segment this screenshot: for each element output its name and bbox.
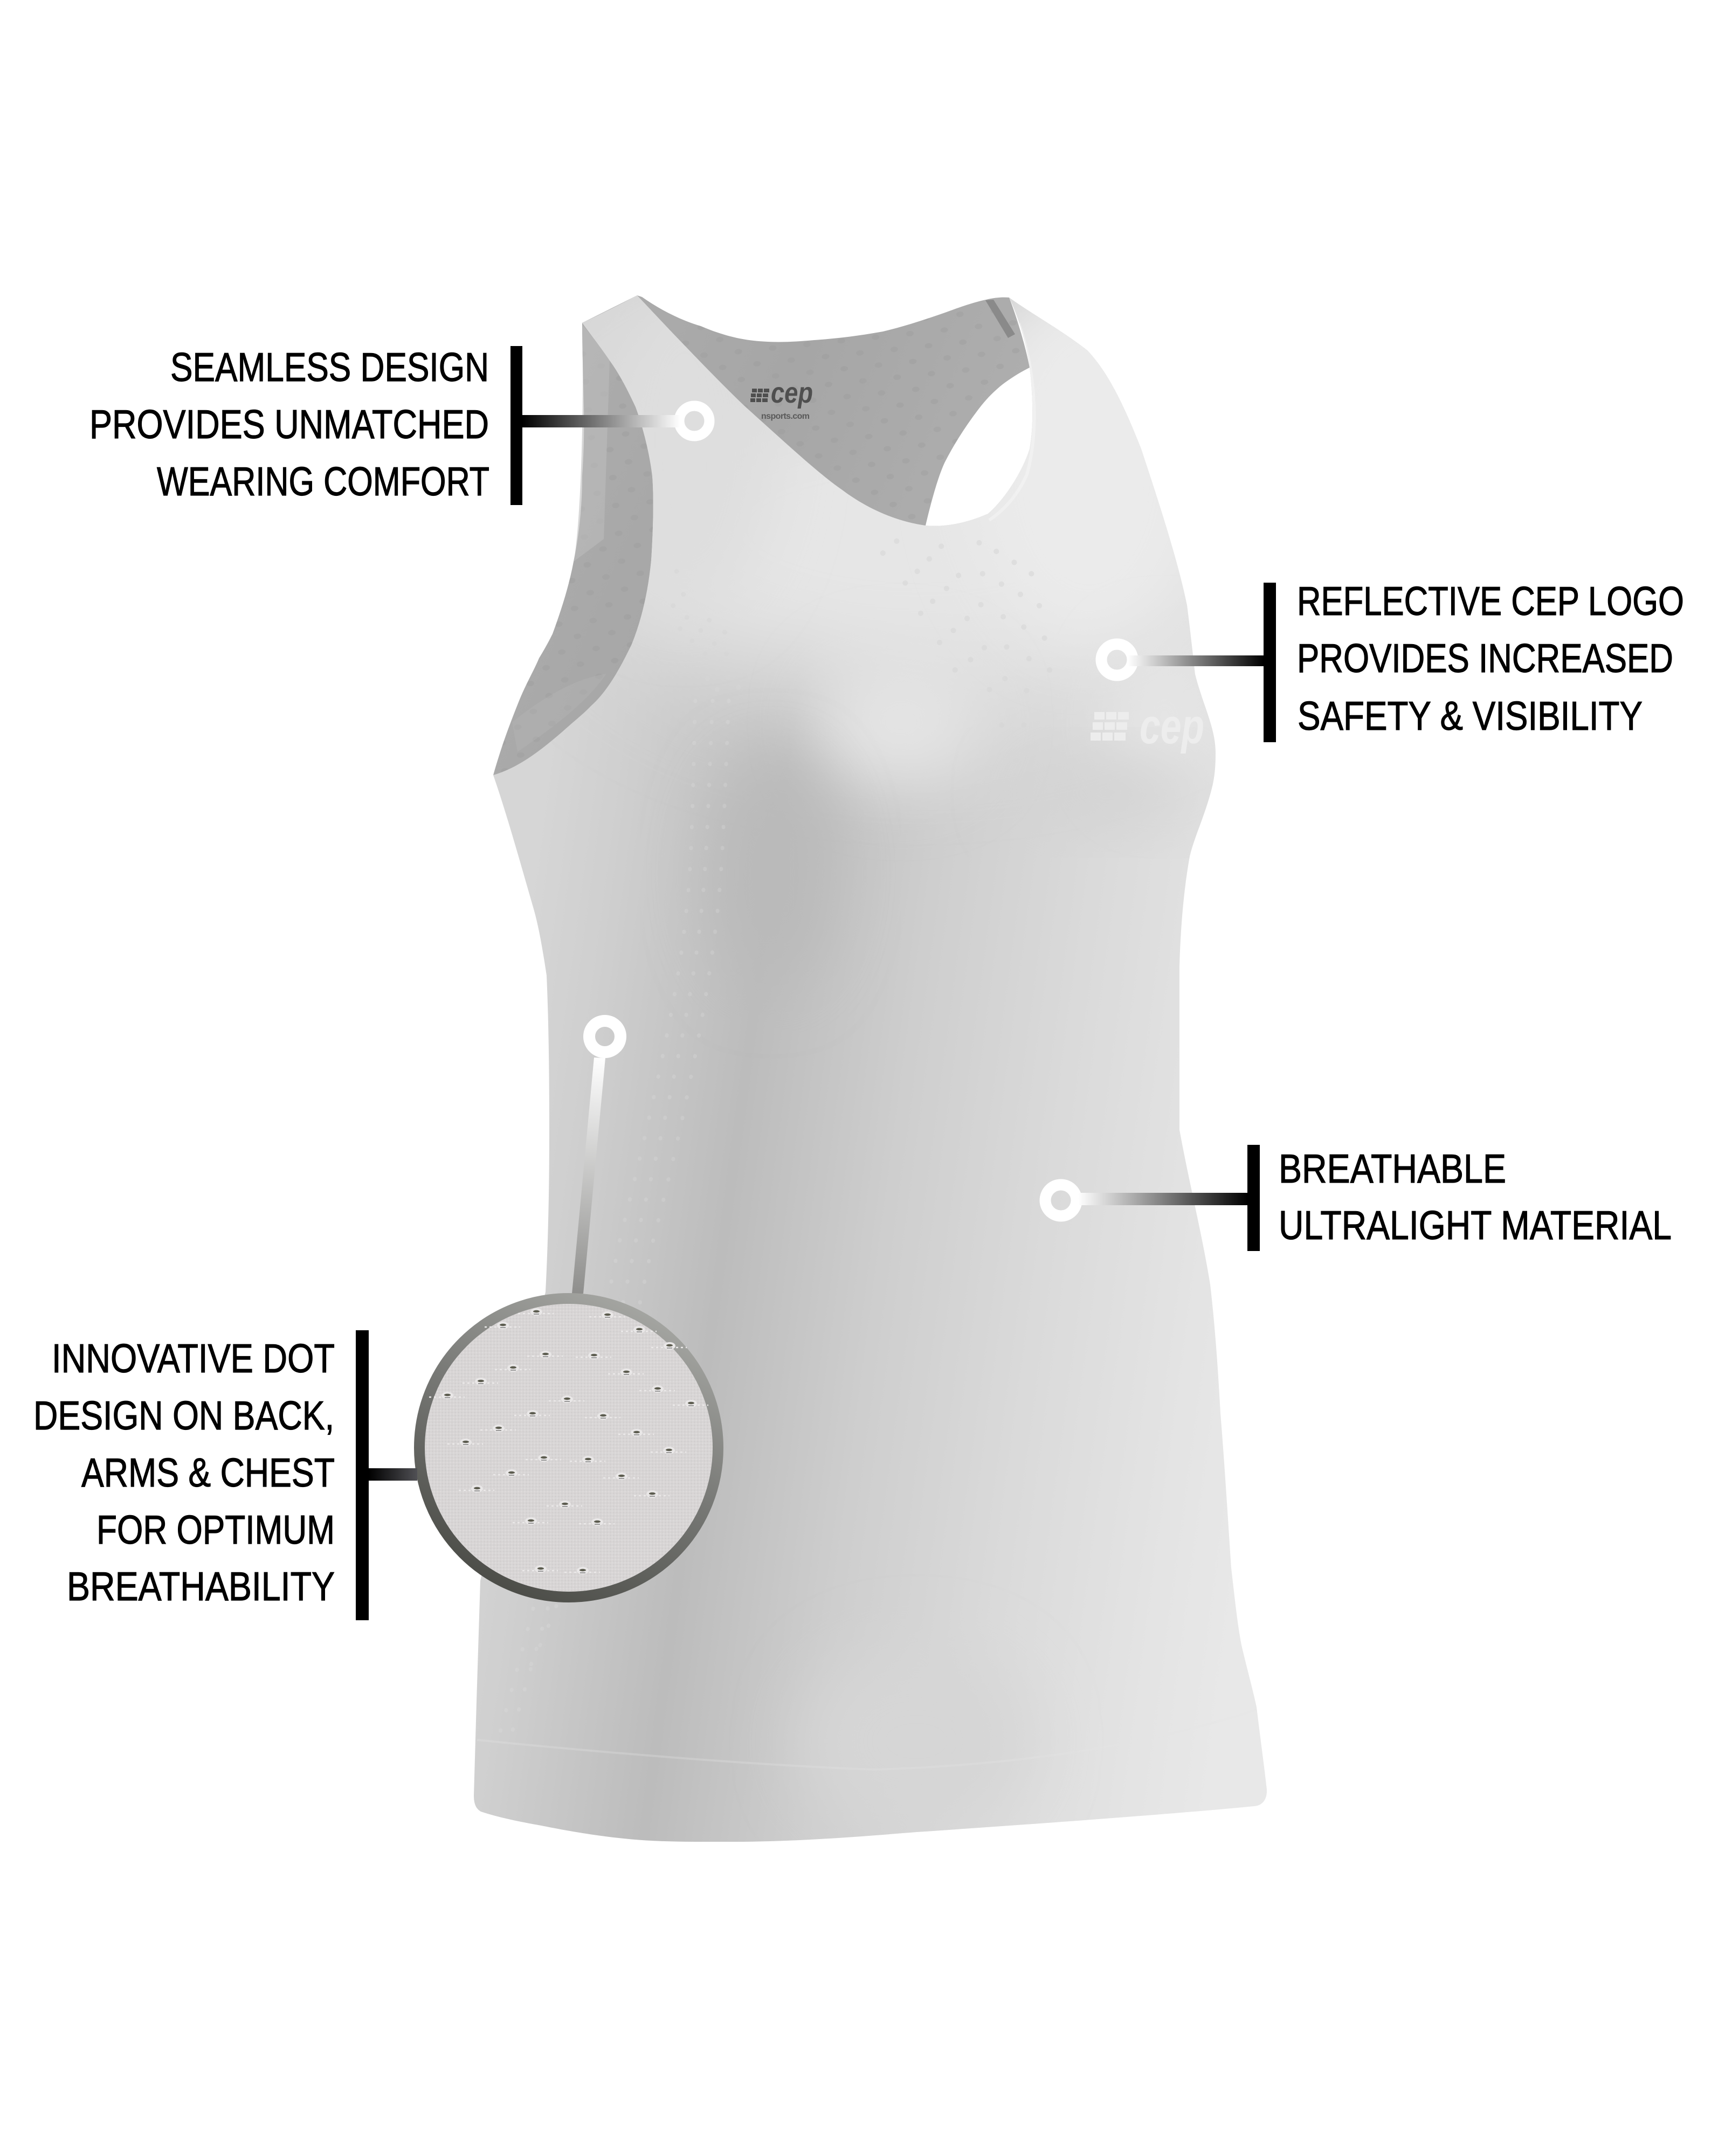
connector: marker to magnifier (572, 1058, 605, 1294)
magnifier: fabric detail (419, 1298, 718, 1597)
text: reflective logo (1297, 578, 1684, 738)
callout: reflective CEP logo (1101, 578, 1684, 742)
text: dot design (33, 1336, 335, 1609)
text: dot design: BREATHABILITY (67, 1564, 335, 1609)
marker ring: seamless design (679, 406, 709, 436)
neck logo: cep (771, 377, 813, 409)
connector: magnifier to bracket (369, 1468, 417, 1481)
text: breathable: BREATHABLE (1279, 1146, 1506, 1191)
text: dot design: INNOVATIVE DOT (52, 1336, 335, 1381)
shirt back: grey inner fabric (493, 295, 1030, 775)
side perforation columns (705, 804, 726, 934)
neck logo: nsports.com (761, 412, 810, 421)
text: dot design: DESIGN ON BACK, (33, 1393, 334, 1438)
callout: breathable ultralight material (1045, 1145, 1672, 1251)
bracket bar: dot design (356, 1330, 369, 1620)
shirt front: body panel (458, 270, 1278, 1854)
bracket bar: breathable (1247, 1145, 1260, 1251)
marker ring: reflective logo (1101, 644, 1133, 675)
chest perforation dots (880, 538, 1047, 640)
text: seamless design: WEARING COMFORT (157, 459, 489, 504)
bracket bar: seamless design (510, 346, 522, 505)
marker ring: breathable (1045, 1185, 1077, 1216)
text: seamless design (89, 344, 489, 504)
strap edge highlight (1019, 323, 1024, 336)
text: dot design: ARMS & CHEST (81, 1450, 335, 1495)
connector: seamless design (522, 415, 680, 427)
chest logo: reflective CEP: cep (1140, 699, 1204, 754)
text: reflective logo: SAFETY & VISIBILITY (1298, 693, 1643, 738)
callout: innovative dot design (33, 1021, 718, 1620)
callout: seamless design (89, 344, 709, 505)
text: seamless design: SEAMLESS DESIGN (170, 344, 489, 390)
text: breathable (1279, 1146, 1672, 1248)
connector: breathable (1078, 1193, 1247, 1205)
text: seamless design: PROVIDES UNMATCHED (89, 402, 489, 447)
connector: reflective logo (1128, 655, 1264, 666)
chest logo: reflective CEP (1091, 712, 1203, 754)
neck logo (750, 377, 813, 421)
bracket bar: reflective logo (1264, 583, 1276, 742)
marker ring: dot design (589, 1021, 620, 1052)
text: breathable: ULTRALIGHT MATERIAL (1279, 1203, 1672, 1248)
text: dot design: FOR OPTIMUM (96, 1507, 335, 1552)
reflective neck tab (985, 300, 1015, 338)
hem line (554, 1746, 760, 1765)
shirt: sleeveless top illustration (458, 270, 1278, 1854)
fabric holes (429, 1308, 708, 1574)
infographic: tank top feature callouts (36, 295, 1683, 1842)
